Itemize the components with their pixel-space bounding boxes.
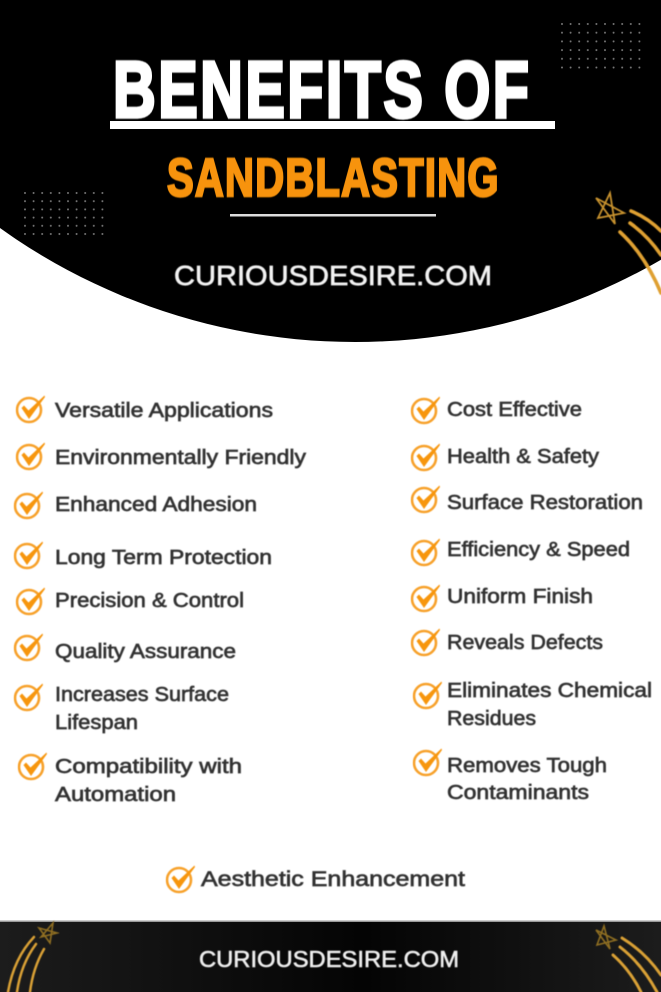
title underline (110, 121, 555, 129)
title: Sandblasting: SANDBLASTING (167, 148, 499, 209)
subtitle divider (230, 214, 436, 216)
title: Benefits of: BENEFITS OF (113, 44, 529, 134)
item: Precision & Control: Precision & Control (55, 590, 244, 612)
item: Eliminates Chemical Residues (414, 680, 652, 730)
item: Compatibility with Automation: Compatibility with (55, 756, 242, 778)
item: Reveals Defects: Reveals Defects (447, 632, 603, 654)
item: Uniform Finish (412, 584, 593, 611)
item: Versatile Applications (17, 396, 273, 422)
item: Cost Effective (412, 396, 582, 423)
item: Health & Safety (412, 444, 599, 470)
item: Long Term Protection: Long Term Protection (55, 547, 272, 569)
icon: shooting star, header right (596, 193, 661, 293)
item: Increases Surface Lifespan: Lifespan (55, 712, 138, 734)
dot pattern: top right (560, 22, 646, 70)
item: Compatibility with Automation (19, 752, 242, 806)
item: Removes Tough Contaminants: Contaminants (447, 782, 589, 804)
icon: shooting star, footer left (8, 923, 57, 992)
icon: shooting star, footer right (596, 926, 661, 992)
item: Efficiency & Speed (412, 538, 630, 565)
website label: header: CURIOUSDESIRE.COM (174, 260, 492, 291)
item: Quality Assurance: Quality Assurance (55, 641, 236, 663)
item: Removes Tough Contaminants: Removes Tough (447, 755, 607, 777)
item: Environmentally Friendly: Environmentally Friendly (55, 447, 306, 469)
benefits list: right column (412, 396, 652, 804)
header: black curved banner (0, 0, 661, 342)
item: Enhanced Adhesion (15, 492, 257, 518)
item: Enhanced Adhesion: Enhanced Adhesion (55, 494, 257, 516)
item: Quality Assurance (15, 634, 236, 663)
item: Removes Tough Contaminants (414, 748, 607, 804)
item: Cost Effective: Cost Effective (447, 399, 582, 421)
dot pattern: left (23, 191, 104, 237)
item: Long Term Protection (15, 542, 272, 569)
item: Efficiency & Speed: Efficiency & Speed (447, 539, 630, 561)
item: Surface Restoration: Surface Restoration (447, 492, 643, 514)
website label: footer: CURIOUSDESIRE.COM (199, 946, 459, 972)
item: Compatibility with Automation: Automation (55, 784, 176, 806)
item: Eliminates Chemical Residues: Residues (447, 708, 536, 730)
item: Health & Safety: Health & Safety (447, 446, 599, 468)
footer bar (0, 920, 661, 992)
item: Uniform Finish: Uniform Finish (447, 586, 593, 608)
item: Eliminates Chemical Residues: Eliminates Chemical (447, 680, 652, 702)
benefits list: left column (15, 396, 306, 806)
item: Aesthetic Enhancement: Aesthetic Enhancement (201, 868, 465, 891)
item: Surface Restoration (412, 486, 643, 514)
item: Aesthetic Enhancement (167, 866, 465, 892)
item: Environmentally Friendly (17, 442, 306, 469)
item: Increases Surface Lifespan (15, 684, 229, 734)
item: Increases Surface Lifespan: Increases Surface (55, 684, 229, 706)
item: Reveals Defects (412, 628, 603, 655)
item: Versatile Applications: Versatile Applications (55, 400, 273, 422)
item: Precision & Control (17, 588, 244, 614)
